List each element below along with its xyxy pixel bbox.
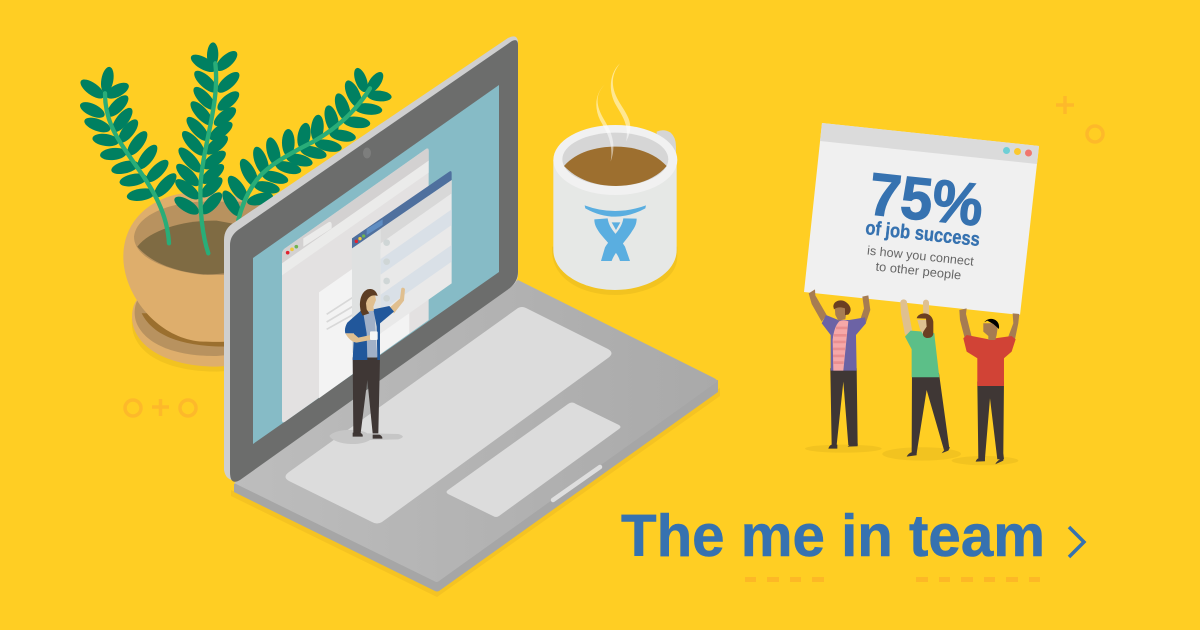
to other people: to other people xyxy=(875,260,962,282)
tee xyxy=(362,309,377,357)
forearm xyxy=(345,333,371,343)
heading: The me in team: The me in team xyxy=(621,503,1045,569)
pot bowl xyxy=(123,192,267,342)
laptop base xyxy=(231,280,720,597)
of job success: of job success xyxy=(864,217,981,251)
window dots xyxy=(1003,147,1032,156)
hinge slot xyxy=(553,467,600,500)
laptop xyxy=(224,36,720,597)
head xyxy=(366,295,376,312)
coffee xyxy=(564,147,667,186)
window front xyxy=(352,171,452,353)
dashed accents xyxy=(745,577,1040,582)
person right xyxy=(952,308,1019,465)
person left xyxy=(805,289,882,453)
legs xyxy=(353,357,380,433)
steam xyxy=(596,63,630,162)
is how you connect: is how you connect xyxy=(866,243,975,269)
mug shadow xyxy=(552,247,677,295)
hair xyxy=(360,289,378,316)
sign panel xyxy=(804,123,1039,315)
trackpad xyxy=(446,402,620,517)
rim xyxy=(553,125,677,195)
mug xyxy=(370,331,378,340)
feet xyxy=(353,433,382,439)
screen content xyxy=(282,148,452,422)
floor shadow xyxy=(329,430,403,444)
screen xyxy=(253,85,499,444)
pot saucer xyxy=(132,297,267,372)
raised arm xyxy=(390,288,405,313)
sign with statistic xyxy=(804,123,1039,315)
frond middle xyxy=(172,42,243,253)
arrow chevron xyxy=(1069,527,1084,557)
window back xyxy=(282,148,429,422)
three people holding sign xyxy=(805,289,1019,465)
handle xyxy=(657,130,676,157)
sign title bar xyxy=(820,123,1039,164)
frond left xyxy=(77,66,180,243)
person middle xyxy=(882,299,961,461)
keyboard area xyxy=(286,307,612,524)
woman on laptop xyxy=(329,288,405,444)
decorative symbols left xyxy=(125,399,196,416)
jacket xyxy=(345,306,394,360)
webcam xyxy=(363,148,371,158)
plant pot with fronds xyxy=(77,42,392,372)
logo xyxy=(585,205,646,261)
mug body xyxy=(553,160,677,290)
frond right xyxy=(219,66,392,220)
decorative symbols right xyxy=(1056,96,1103,142)
laptop lid xyxy=(224,36,518,482)
statistic 75%: 75% xyxy=(866,160,986,239)
coffee mug xyxy=(552,63,677,295)
